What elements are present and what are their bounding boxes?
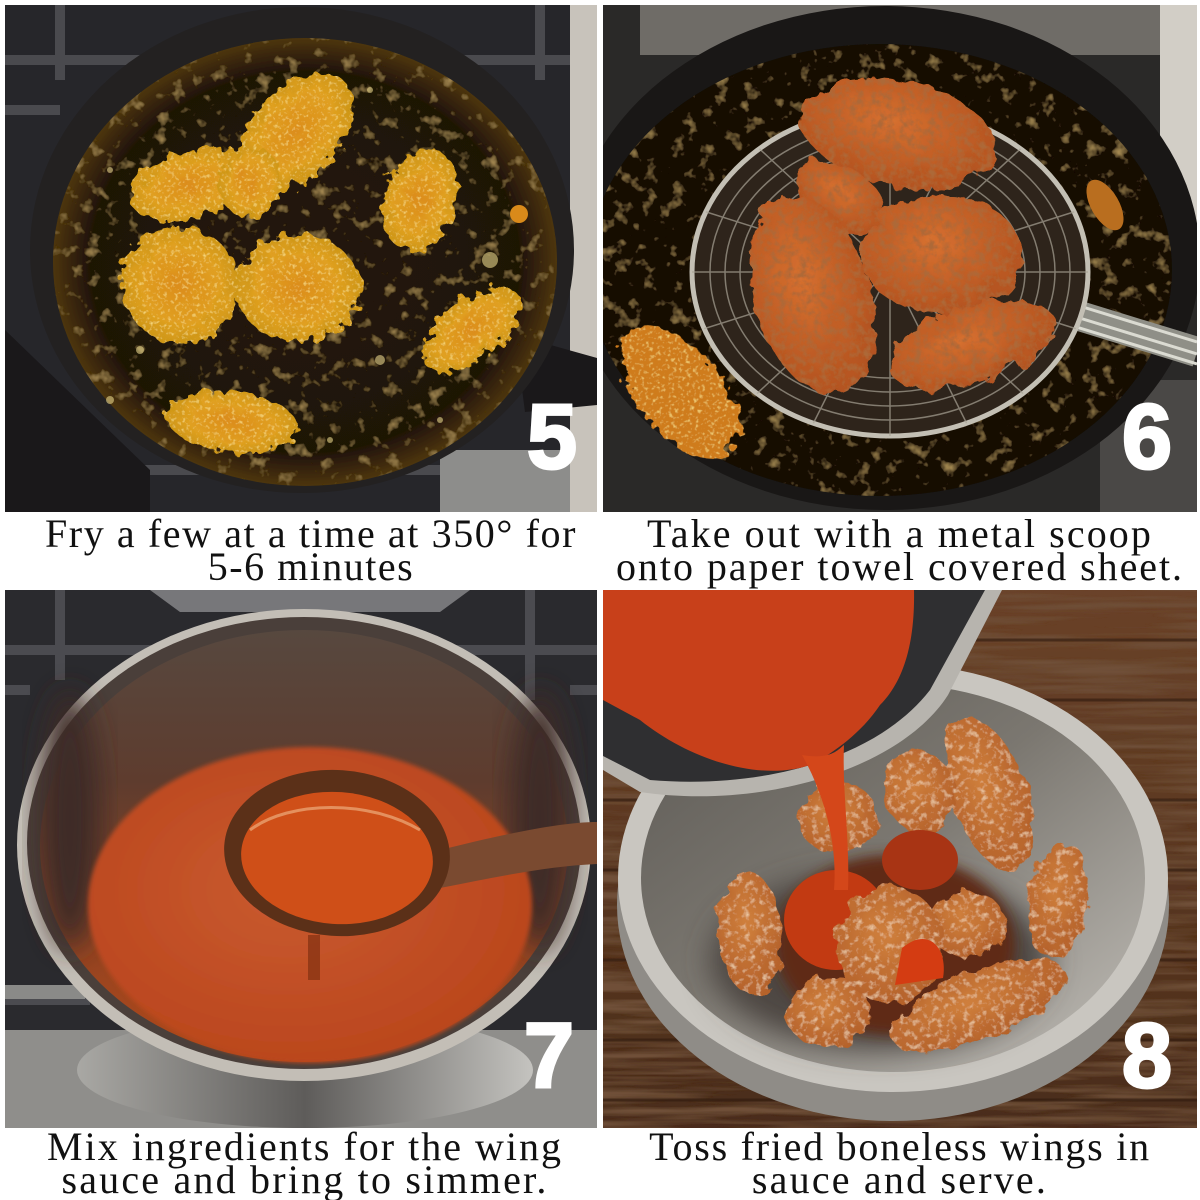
caption: step 5: Fry a few at a time at 350° for [45,511,577,556]
step number 8: 8 [1122,1005,1172,1107]
caption: step 6: Take out with a metal scoop [647,511,1153,556]
step number 6: 6 [1122,386,1172,488]
chicken piece left in pan [615,324,746,460]
caption: step 8: Toss fried boneless wings in [649,1124,1151,1169]
wooden spoon [218,762,597,980]
scoop handle [1078,302,1197,366]
panel: step 5 frying in skillet [5,5,597,512]
skillet and oil [30,7,574,493]
fried chicken pieces [748,76,1056,396]
sauce surface [88,747,532,1063]
caption: step 6: onto paper towel covered sheet. [616,544,1184,589]
caption: step 5 [45,511,577,589]
panel: step 8 tossing wings in bowl [603,590,1197,1128]
wire scoop [690,100,1090,440]
caption: step 6 [616,511,1184,589]
pot base [77,1032,533,1128]
caption: step 7: Mix ingredients for the wing [47,1124,563,1169]
step number 5: 5 [527,386,577,488]
sauce pool under wings [775,855,1015,1035]
caption: step 8 [649,1124,1151,1200]
mixing bowl [617,664,1169,1121]
caption: step 5: 5-6 minutes [208,544,414,589]
caption: step 7 [47,1124,563,1200]
panel: step 6 scooping fried pieces [570,5,1200,512]
step number 7: 7 [524,1005,574,1107]
panel: step 7 sauce in saucepan [5,590,597,1128]
pouring bowl and sauce [603,590,1002,890]
saucepan [17,609,591,1081]
coated wings [714,707,1098,1071]
frying chicken pieces [118,71,523,458]
